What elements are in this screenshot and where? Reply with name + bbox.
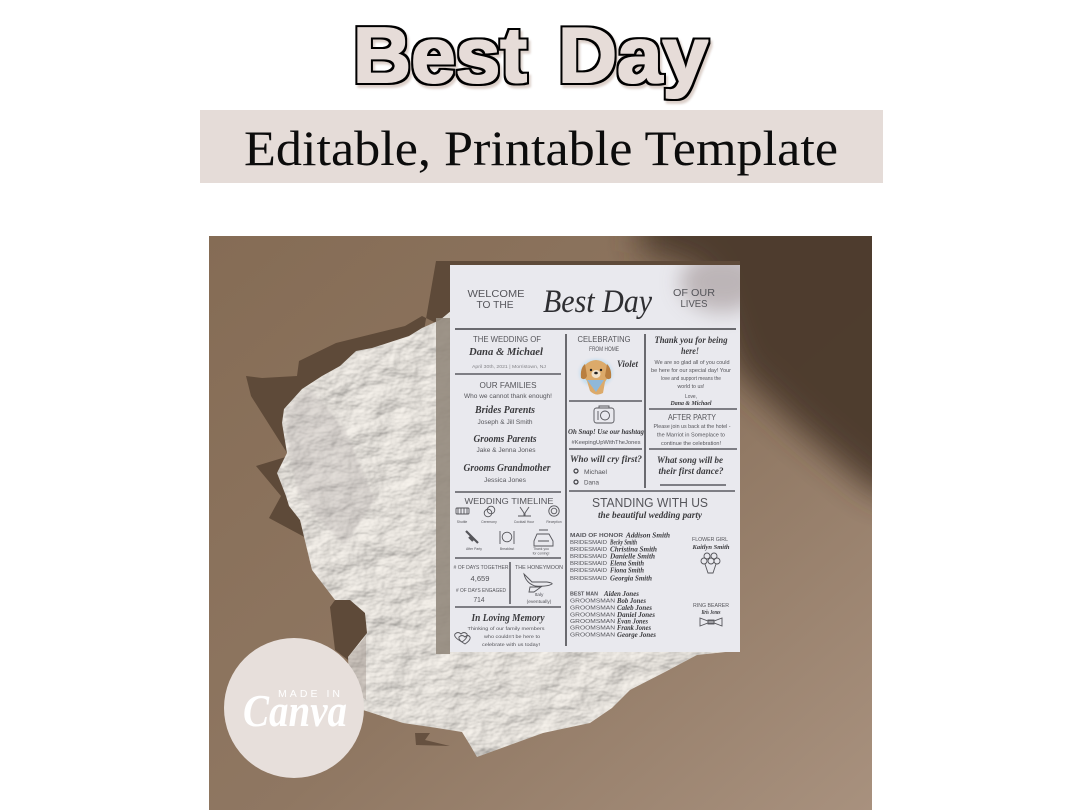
icon: bouquet: [701, 553, 720, 573]
panel: wedding timeline: for coming!: [533, 552, 549, 556]
panel: thank you: be here for our special day! Your: [651, 368, 731, 374]
list: bridesmaids: Fiona Smith: [610, 566, 644, 574]
icon: getaway car: [534, 530, 553, 546]
list: bridesmaids: Danielle Smith: [609, 552, 655, 560]
list: bridesmaids: Becky Smith: [609, 538, 637, 546]
icon: hearts: [455, 632, 470, 644]
list: groomsmen: Evan Jones: [616, 616, 648, 626]
list: bridesmaids: BRIDESMAID: [570, 561, 607, 567]
torn paper cast shadow: [246, 261, 740, 700]
document shadow on paper: [436, 318, 450, 654]
panel: thank you: Thank you for being: [654, 336, 728, 346]
panel: hashtag: Oh Snap! Use our hashtag: [568, 427, 644, 436]
list: bridesmaids: MAID OF HONOR: [570, 533, 624, 539]
panel: our families: Who we cannot thank enough!: [464, 394, 552, 400]
badge: made in Canva: MADE IN: [278, 688, 340, 700]
list: groomsmen: George Jones: [617, 630, 656, 639]
list: bridesmaids: BRIDESMAID: [570, 554, 607, 560]
panel: standing with us: STANDING WITH US: [592, 496, 708, 510]
list: bridesmaids: BRIDESMAID: [570, 576, 607, 582]
panel: after party: [654, 413, 731, 447]
panel: who will cry first: Who will cry first?: [570, 455, 642, 465]
icon: camera: [594, 406, 614, 423]
list: bridesmaids: BRIDESMAID: [570, 540, 607, 546]
panel: our families: Jake & Jenna Jones: [476, 448, 536, 454]
panel: the honeymoon: THE HONEYMOON: [515, 565, 563, 571]
document header: [468, 289, 714, 319]
panel: number of days: # OF DAYS TOGETHER: [454, 565, 509, 571]
panel: thank you: Dana & Michael: [670, 400, 712, 407]
panel: hashtag: #KeepingUpWithTheJones: [572, 440, 641, 446]
panel: our families: Brides Parents: [474, 404, 535, 416]
document sheet: [450, 265, 740, 652]
panel: our families: Grooms Parents: [474, 433, 536, 445]
list: bridesmaids: Georgia Smith: [610, 574, 652, 582]
panel: who will cry first: Michael: [584, 469, 608, 476]
panel: thank you: love and support means the: [661, 376, 721, 382]
panel: first dance: What song will be: [657, 456, 724, 466]
list: groomsmen: Aiden Jones: [603, 589, 639, 598]
panel: after party: AFTER PARTY: [668, 413, 717, 422]
panel: the wedding of: [468, 335, 546, 369]
panel: wedding timeline: Cocktail Hour: [514, 520, 535, 524]
list: groomsmen: [570, 589, 656, 639]
panel: in loving memory: [455, 613, 545, 647]
panel: thank you: [651, 336, 731, 407]
panel: after party: the Marriot in Someplace to: [657, 432, 725, 438]
list: groomsmen: GROOMSMAN: [570, 606, 615, 612]
badge: made in Canva: [224, 638, 364, 778]
list: bridesmaids: BRIDESMAID: [570, 547, 607, 553]
panel: ring bearer: Kris Jones: [701, 609, 721, 616]
photo: mockup on brown background: [209, 236, 872, 810]
panel: number of days: [454, 565, 509, 604]
list: groomsmen: Frank Jones: [617, 623, 651, 632]
icon: bottle: [466, 531, 478, 543]
panel: celebrating from home: Violet: [617, 360, 638, 370]
panel: our families: [464, 381, 552, 484]
document header: TO THE: [476, 299, 514, 311]
panel: number of days: 714: [474, 597, 485, 604]
panel: our families: Joseph & Jill Smith: [478, 420, 532, 426]
icon: rings: [484, 506, 495, 517]
panel: wedding timeline: WEDDING TIMELINE: [464, 496, 554, 506]
panel: our families: Jessica Jones: [484, 478, 526, 484]
panel: celebrating from home: FROM HOME: [589, 346, 619, 353]
icon: cocktail glasses: [518, 507, 531, 516]
panel: number of days: 4,659: [470, 576, 490, 583]
panel: wedding timeline: Ceremony: [481, 520, 497, 524]
panel: wedding timeline: Shuttle: [457, 520, 467, 524]
panel: our families: Grooms Grandmother: [464, 462, 551, 474]
panel: in loving memory: In Loving Memory: [471, 613, 545, 624]
list: groomsmen: GROOMSMAN: [570, 626, 615, 632]
panel: flower girl: [692, 537, 730, 573]
panel: first dance: [657, 456, 724, 477]
list: groomsmen: BEST MAN: [570, 592, 598, 598]
list: groomsmen: GROOMSMAN: [570, 598, 615, 604]
torn paper: [277, 310, 735, 757]
panel: the wedding of: April 30th, 2021 | Morristown, NJ: [472, 364, 546, 369]
list: groomsmen: GROOMSMAN: [570, 632, 615, 638]
panel: wedding timeline: Breakfast: [500, 547, 514, 551]
panel: after party: continue the celebration!: [661, 441, 721, 447]
panel: celebrating from home: CELEBRATING: [578, 335, 630, 344]
panel: celebrating from home: [576, 335, 638, 395]
list: groomsmen: Bob Jones: [616, 596, 646, 605]
document header: Best Day: [543, 284, 652, 320]
document header: LIVES: [680, 298, 708, 310]
list: groomsmen: GROOMSMAN: [570, 619, 615, 625]
panel: flower girl: Kaitlyn Smith: [692, 544, 730, 551]
list: bridesmaids: [570, 530, 670, 582]
panel: who will cry first: [570, 455, 642, 486]
panel: ring bearer: RING BEARER: [693, 603, 729, 609]
icon: bow tie: [700, 618, 722, 626]
list: groomsmen: Daniel Jones: [616, 610, 655, 619]
panel: the wedding of: Dana & Michael: [468, 347, 543, 358]
panel: the honeymoon: [515, 565, 563, 605]
icon: reception plate: [549, 506, 559, 516]
subtitle banner: [200, 110, 883, 183]
panel: wedding timeline: After Party: [466, 547, 482, 551]
badge: made in Canva: Canva: [243, 685, 347, 736]
list: groomsmen: Caleb Jones: [617, 603, 652, 612]
panel: who will cry first: Dana: [584, 480, 599, 486]
panel: in loving memory: celebrate with us today!: [482, 642, 540, 647]
icon: dinner plate: [500, 531, 514, 544]
panel: the honeymoon: Italy: [535, 592, 544, 598]
panel: first dance: their first dance?: [658, 467, 724, 477]
panel: thank you: world to us!: [678, 384, 704, 390]
panel: the honeymoon: (eventually): [527, 599, 552, 605]
icon: airplane: [524, 574, 552, 592]
panel: the wedding of: THE WEDDING OF: [473, 335, 541, 344]
list: bridesmaids: BRIDESMAID: [570, 568, 607, 574]
list: bridesmaids: Addison Smith: [625, 530, 670, 540]
panel: standing with us: [570, 496, 730, 639]
icon: shuttle bus: [456, 508, 469, 514]
icon: dog portrait: [578, 358, 614, 395]
subtitle banner: Editable, Printable Template: [244, 120, 838, 176]
panel: wedding timeline: [456, 496, 562, 556]
document header: OF OUR: [673, 287, 715, 299]
document header: WELCOME: [468, 288, 524, 300]
panel: wedding timeline: Reception: [546, 520, 562, 524]
panel: thank you: We are so glad all of you could: [654, 360, 730, 366]
list: groomsmen: GROOMSMAN: [570, 612, 615, 618]
panel: in loving memory: who couldn't be here to: [484, 634, 540, 639]
panel: ring bearer: [693, 603, 729, 626]
panel: thank you: Love,: [685, 394, 697, 400]
panel: our families: OUR FAMILIES: [480, 381, 536, 390]
panel: standing with us: the beautiful wedding party: [598, 511, 703, 521]
title: Best Day: Day: [558, 11, 708, 99]
list: bridesmaids: Elena Smith: [609, 558, 644, 568]
panel: number of days: # OF DAYS ENGAGED: [456, 588, 506, 594]
panel: thank you: here!: [681, 347, 699, 357]
list: bridesmaids: Christina Smith: [610, 544, 657, 554]
panel: wedding timeline: Thank you: [533, 547, 549, 551]
title: Best Day: [353, 11, 708, 99]
panel: flower girl: FLOWER GIRL: [692, 537, 728, 543]
panel: hashtag: [568, 406, 644, 446]
title: Best Day: Best: [353, 11, 527, 99]
panel: after party: Please join us back at the hotel -: [654, 424, 731, 430]
panel: in loving memory: Thinking of our family members: [468, 626, 545, 631]
